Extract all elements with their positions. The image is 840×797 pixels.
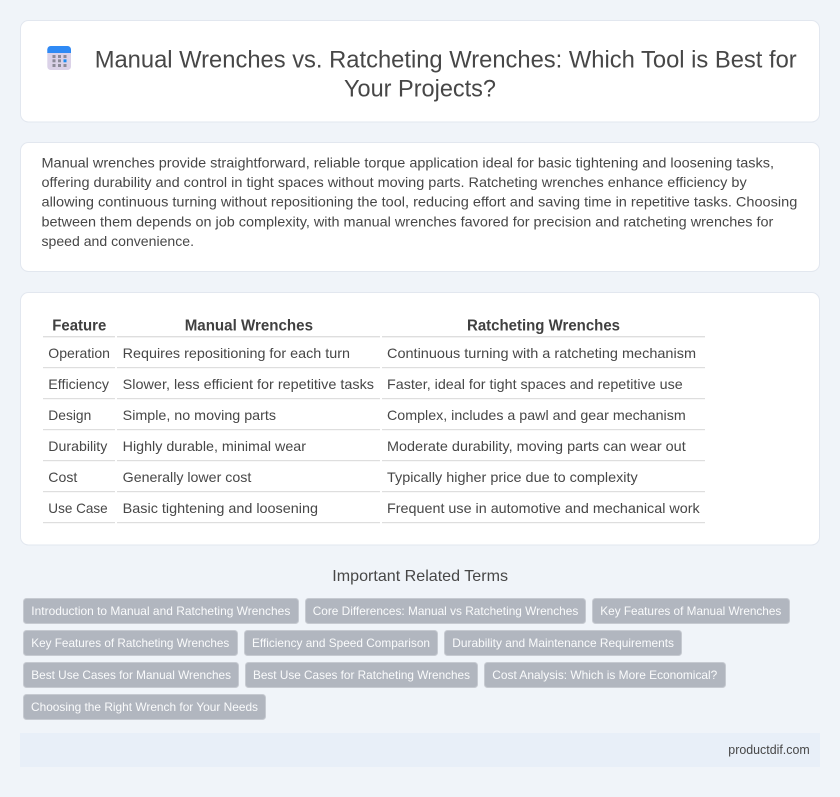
panel: comparison table [20, 292, 820, 545]
title [95, 47, 797, 103]
table header row [52, 318, 620, 334]
tag: introduction: Introduction to Manual and Ratcheting Wrenches [31, 604, 290, 618]
row: use case: Use Case [48, 500, 108, 516]
summary paragraph: between them depends on job complexity, with manual wrenches favored for precision and ratcheting wrenches for [42, 213, 774, 229]
footer: productdif.com [728, 743, 810, 757]
tag: ratcheting use cases: Best Use Cases for Ratcheting Wrenches [253, 668, 470, 682]
tag: cost analysis: Cost Analysis: Which is More Economical? [492, 668, 718, 682]
tag: ratcheting use cases [246, 662, 478, 688]
table header row: Manual Wrenches [185, 318, 313, 334]
icon: calendar [47, 46, 71, 70]
panel: header [20, 20, 820, 122]
title: Manual Wrenches vs. Ratcheting Wrenches: Which Tool is Best for [95, 47, 797, 74]
row: efficiency: Faster, ideal for tight spaces and repetitive use [387, 376, 683, 392]
row: use case: Frequent use in automotive and mechanical work [387, 500, 701, 516]
tag: ratcheting features [24, 630, 238, 656]
row: cost: Cost [48, 469, 77, 485]
row: efficiency [48, 376, 683, 392]
related terms tags [24, 598, 790, 720]
tag: manual use cases [24, 662, 238, 688]
row: efficiency: Efficiency [48, 376, 109, 392]
tag: durability [444, 630, 682, 656]
row: durability [48, 438, 686, 454]
row: cost: Generally lower cost [123, 469, 251, 485]
table header row: Ratcheting Wrenches [467, 318, 620, 334]
row: operation [48, 345, 696, 361]
row: design [48, 407, 686, 423]
row: operation: Continuous turning with a ratcheting mechanism [387, 345, 696, 361]
row: use case [48, 500, 701, 516]
row: durability: Durability [48, 438, 107, 454]
heading: related terms: Important Related Terms [332, 568, 508, 585]
table header row: Feature [52, 318, 107, 334]
tag: ratcheting features: Key Features of Ratcheting Wrenches [31, 636, 229, 650]
panel: summary [20, 142, 820, 272]
tag: manual use cases: Best Use Cases for Manual Wrenches [31, 668, 231, 682]
tag: durability: Durability and Maintenance Requirements [452, 636, 674, 650]
row: design: Design [48, 407, 91, 423]
tag: manual features [592, 598, 790, 624]
tag: efficiency: Efficiency and Speed Comparison [252, 636, 430, 650]
row: durability: Highly durable, minimal wear [123, 438, 306, 454]
row: use case: Basic tightening and loosening [123, 500, 318, 516]
tag: core differences [306, 598, 586, 624]
summary paragraph: allowing continuous turning without repositioning the tool, reducing effort and saving time in repetitive tasks. Choosing [42, 194, 797, 210]
tag: manual features: Key Features of Manual Wrenches [600, 604, 781, 618]
row: design: Simple, no moving parts [123, 407, 276, 423]
row: operation: Operation [48, 345, 110, 361]
tag: choosing: Choosing the Right Wrench for Your Needs [31, 700, 258, 714]
tag: cost analysis [484, 662, 726, 688]
summary paragraph: speed and convenience. [42, 233, 194, 249]
tag: introduction [24, 598, 298, 624]
row: efficiency: Slower, less efficient for repetitive tasks [123, 376, 374, 392]
row: cost [48, 469, 638, 485]
row: design: Complex, includes a pawl and gear mechanism [387, 407, 686, 423]
tag: efficiency [244, 630, 438, 656]
summary paragraph: Manual wrenches provide straightforward, reliable torque application ideal for basic tightening and loosening tasks, [42, 154, 774, 170]
footer [20, 733, 820, 767]
summary paragraph [42, 154, 797, 249]
row: cost: Typically higher price due to complexity [387, 469, 638, 485]
row: operation: Requires repositioning for each turn [123, 345, 350, 361]
title: Your Projects? [344, 76, 496, 103]
row: durability: Moderate durability, moving parts can wear out [387, 438, 686, 454]
tag: core differences: Core Differences: Manual vs Ratcheting Wrenches [313, 604, 578, 618]
tag: choosing [24, 694, 266, 720]
summary paragraph: offering durability and control in tight spaces without moving parts. Ratcheting wrenches enhance efficiency by [42, 174, 747, 190]
